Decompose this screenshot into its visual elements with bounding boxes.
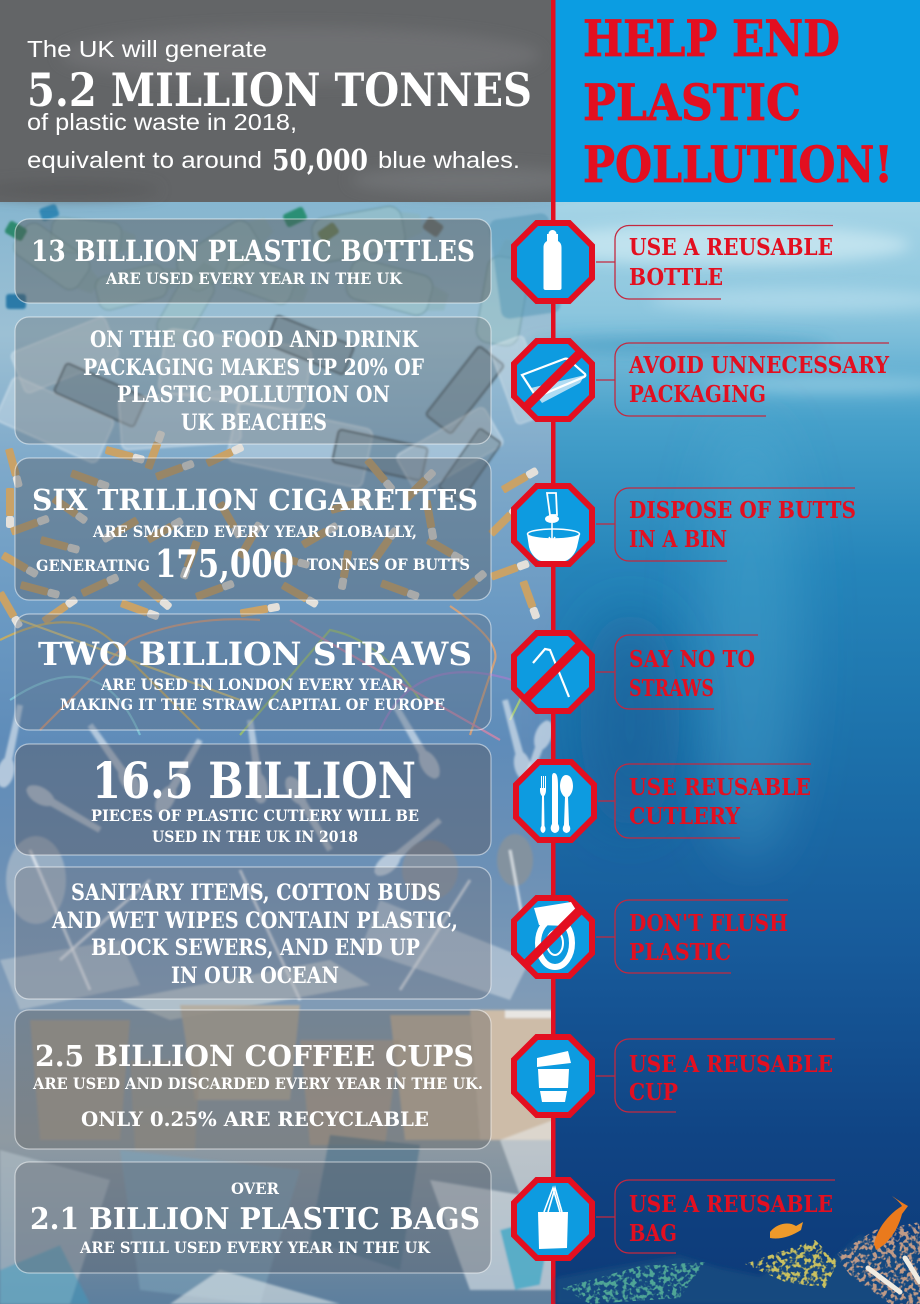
icon: reusable cup <box>511 1034 595 1118</box>
icon: cutlery <box>513 759 597 843</box>
callout: avoid packaging: AVOID UNNECESSARY <box>628 352 890 379</box>
callout: reusable bottle: USE A REUSABLE <box>629 234 833 261</box>
callout: no straws <box>596 635 758 709</box>
callout: don't flush plastic <box>596 900 788 973</box>
statement: UK BEACHES <box>181 410 327 436</box>
callout: reusable cutlery <box>598 764 811 838</box>
icon: bottle <box>511 220 595 304</box>
subtext: ARE STILL USED EVERY YEAR IN THE UK <box>79 1238 431 1257</box>
statement: SANITARY ITEMS, COTTON BUDS <box>71 880 441 906</box>
generating label: GENERATING <box>36 556 150 575</box>
icon: reusable bag <box>511 1177 595 1261</box>
title line 1: HELP END <box>583 9 840 68</box>
callout: reusable bottle: BOTTLE <box>629 264 723 291</box>
tonnes figure: 175,000 <box>155 541 294 586</box>
callout: reusable bag <box>596 1180 835 1253</box>
statement: PACKAGING MAKES UP 20% OF <box>83 355 424 381</box>
subtext: ARE USED AND DISCARDED EVERY YEAR IN THE UK. <box>32 1074 483 1093</box>
callout: dispose of butts: DISPOSE OF BUTTS <box>629 497 856 524</box>
header panel: call to action <box>553 0 920 202</box>
over label: OVER <box>231 1179 280 1198</box>
tonnes label: TONNES OF BUTTS <box>307 555 470 574</box>
subtext line 2: MAKING IT THE STRAW CAPITAL OF EUROPE <box>60 695 445 714</box>
panel: plastic bags <box>15 1162 491 1273</box>
icon: no flushing <box>511 895 595 979</box>
background: left plastic waste side <box>0 202 553 1304</box>
intro line: The UK will generate <box>27 36 267 62</box>
heading: 2.1 BILLION PLASTIC BAGS <box>30 1202 480 1237</box>
subtext: ARE SMOKED EVERY YEAR GLOBALLY, <box>92 522 417 541</box>
title line 2: PLASTIC <box>583 73 801 132</box>
whale figure: 50,000 <box>272 143 368 177</box>
statement: IN OUR OCEAN <box>171 963 339 989</box>
statement <box>83 327 424 436</box>
whale label: blue whales. <box>378 147 520 173</box>
recyclable note: ONLY 0.25% ARE RECYCLABLE <box>81 1107 429 1131</box>
background: right ocean side <box>530 202 920 1304</box>
plastic cutlery photo <box>0 698 557 880</box>
icon: dispose in bin <box>511 483 595 567</box>
heading: TWO BILLION STRAWS <box>38 635 472 673</box>
plastic bags photo <box>0 1120 553 1304</box>
callout: dispose of butts: IN A BIN <box>629 526 727 553</box>
callout: avoid packaging <box>596 343 890 416</box>
heading: 13 BILLION PLASTIC BOTTLES <box>31 234 475 268</box>
callout: no straws: SAY NO TO <box>629 646 755 673</box>
statement <box>51 880 458 989</box>
panel: straws <box>15 614 491 730</box>
callout: reusable cup: CUP <box>629 1079 678 1106</box>
callout: avoid packaging: PACKAGING <box>629 381 766 408</box>
heading: 16.5 BILLION <box>92 751 416 810</box>
callout: reusable cup <box>596 1039 835 1112</box>
cigarette butts photo <box>0 430 541 629</box>
panel: cigarettes <box>15 458 491 600</box>
heading: 2.5 BILLION COFFEE CUPS <box>35 1039 474 1073</box>
callout: don't flush plastic: PLASTIC <box>629 939 731 966</box>
statement: BLOCK SEWERS, AND END UP <box>91 935 420 961</box>
header panel: UK waste statistic <box>0 0 590 202</box>
subtext line 1: PIECES OF PLASTIC CUTLERY WILL BE <box>91 806 419 825</box>
statement: ON THE GO FOOD AND DRINK <box>90 327 419 353</box>
coral and fish scene <box>556 1196 920 1304</box>
plastic bottles photo <box>4 201 562 348</box>
central red timeline <box>551 0 556 1304</box>
callout: dispose of butts <box>596 488 856 561</box>
icon: no straws <box>511 630 595 714</box>
coffee cups photo <box>30 1005 553 1150</box>
sanitary items photo <box>0 834 533 1020</box>
panel: cutlery <box>15 744 491 855</box>
callout: reusable cutlery: CUTLERY <box>629 803 741 830</box>
callout: reusable bag: USE A REUSABLE <box>629 1191 833 1218</box>
equivalence line: equivalent to around <box>27 147 262 173</box>
statement: AND WET WIPES CONTAIN PLASTIC, <box>51 908 458 934</box>
headline figure: 5.2 MILLION TONNES <box>27 63 532 117</box>
panel: plastic bottles <box>15 219 491 303</box>
panel: sanitary items <box>15 867 491 999</box>
subtext line 2: USED IN THE UK IN 2018 <box>152 827 358 846</box>
callout: reusable bag: BAG <box>629 1220 677 1247</box>
subtext: ARE USED EVERY YEAR IN THE UK <box>105 269 403 288</box>
callout: no straws: STRAWS <box>629 675 714 702</box>
callout: reusable bottle <box>596 226 833 299</box>
panel: food packaging <box>15 317 491 444</box>
icon: no packaging <box>511 338 595 422</box>
plastic waste line: of plastic waste in 2018, <box>27 109 297 135</box>
callout: reusable cup: USE A REUSABLE <box>629 1051 833 1078</box>
callout: reusable cutlery: USE REUSABLE <box>629 774 811 801</box>
callout: don't flush plastic: DON'T FLUSH <box>629 910 788 937</box>
food packaging photo <box>0 315 551 502</box>
drinking straws photo <box>0 606 540 740</box>
heading: SIX TRILLION CIGARETTES <box>32 483 478 517</box>
panel: coffee cups <box>15 1010 491 1149</box>
subtext line 1: ARE USED IN LONDON EVERY YEAR, <box>100 675 409 694</box>
statement: PLASTIC POLLUTION ON <box>117 382 390 408</box>
